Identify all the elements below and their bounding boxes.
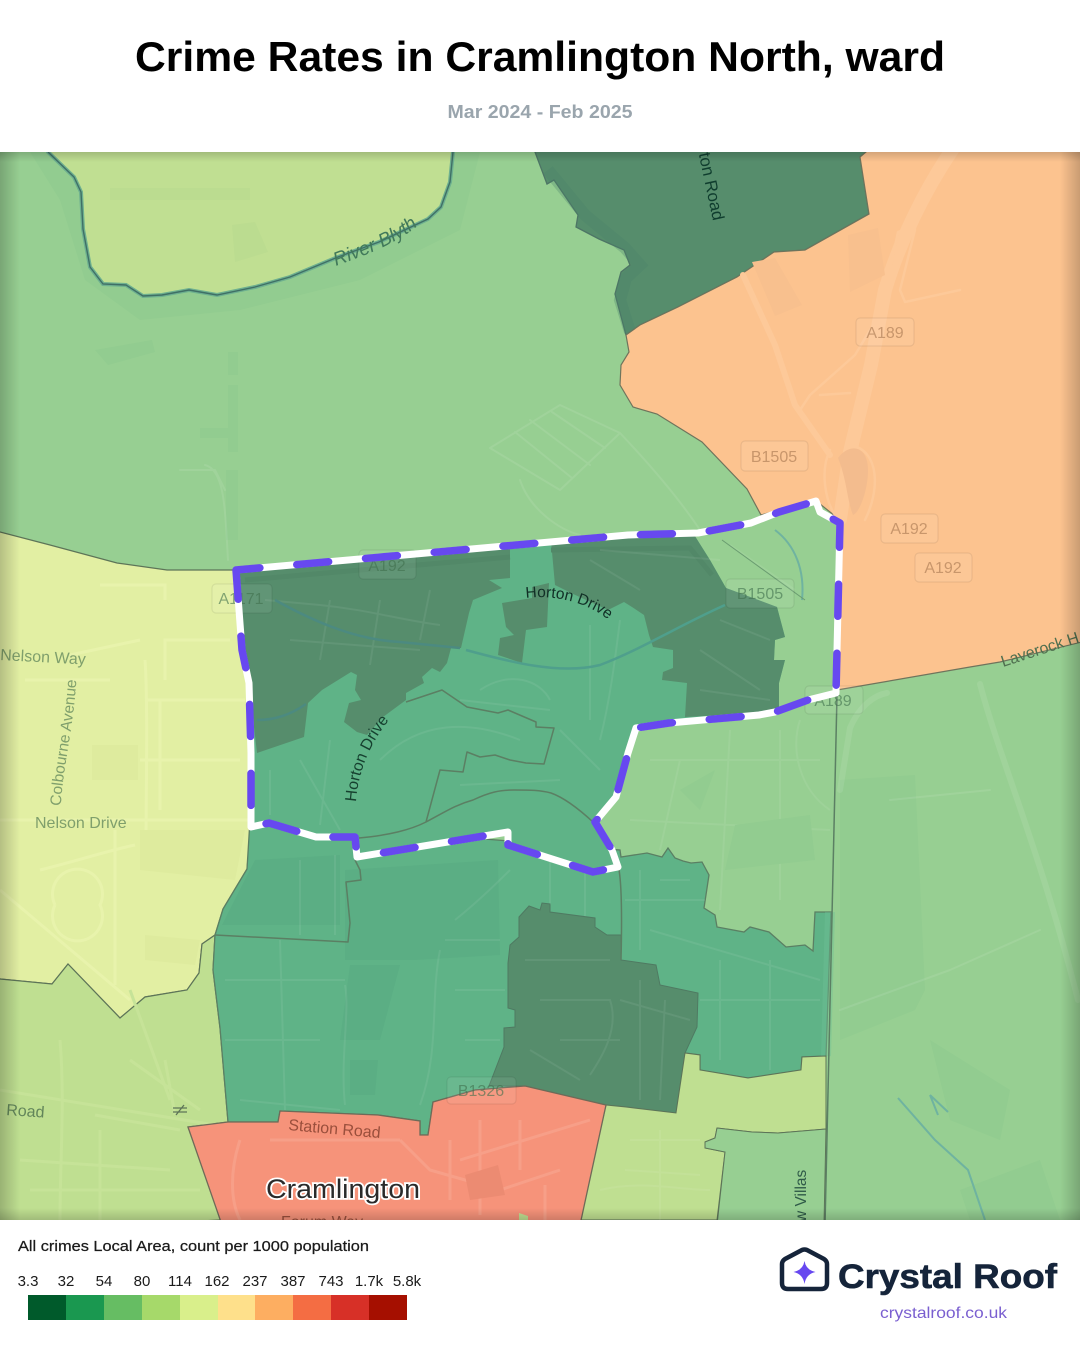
ward boundary: white underlay and purple dashes <box>236 501 840 872</box>
subtitle: date range: Mar 2024 - Feb 2025 <box>448 101 632 122</box>
legend tick values: 743 <box>318 1273 344 1290</box>
region: yellow-green south-west <box>0 935 228 1230</box>
legend tick values: 237 <box>242 1273 268 1290</box>
map label: Laverock: Laverock H <box>999 630 1080 671</box>
map label: Station Road: Station Road <box>288 1117 381 1142</box>
legend <box>18 1238 422 1320</box>
road network on orange <box>743 150 960 520</box>
streets on yellow-green <box>128 990 214 1124</box>
field patches in river field <box>110 188 268 262</box>
legend tick values: 80 <box>134 1273 150 1290</box>
region: inner south-east light green <box>705 1128 826 1225</box>
icon: house with star <box>782 1250 827 1289</box>
region: river field north-west <box>48 142 453 296</box>
ward area: mid green <box>236 533 785 872</box>
legend tick values: 32 <box>58 1273 74 1290</box>
road shield: A192 east <box>881 514 938 543</box>
road shield: A192 ward <box>359 550 416 579</box>
streets in mid green <box>225 855 820 1110</box>
ward streets <box>265 550 770 830</box>
road shield: B1326: B1326 <box>458 1083 504 1100</box>
inner area boundaries <box>359 790 593 838</box>
road shield: A192 east lower: A192 <box>924 560 962 577</box>
legend tick values: 54 <box>96 1273 112 1290</box>
map label: Villas: w Villas <box>793 1169 810 1223</box>
map label: Cramlington: Cramlington <box>266 1174 420 1204</box>
road shield: B1505 ward <box>726 579 794 608</box>
road shield: A192 ward: A192 <box>368 558 406 575</box>
legend tick values: 162 <box>204 1273 230 1290</box>
map label: Horton Road: Horton Road <box>689 124 728 222</box>
ward area: light base <box>236 501 840 872</box>
road shield: A192 east: A192 <box>890 521 928 538</box>
region: dark green south <box>489 903 698 1113</box>
legend title: All crimes Local Area, count per 1000 population <box>18 1238 369 1255</box>
streams <box>275 600 460 648</box>
road shield: A189: A189 <box>866 325 904 342</box>
field patches in mid green <box>222 855 500 1095</box>
map label: Horton Drive west: Horton Drive <box>345 716 388 801</box>
icon: rail station symbol <box>173 1105 187 1115</box>
legend tick values: 387 <box>280 1273 306 1290</box>
legend tick values: 5.8k <box>393 1273 422 1290</box>
map label: Nelson Drive: Nelson Drive <box>35 815 127 832</box>
map label: Forum Way: Forum Way <box>281 1214 363 1231</box>
road shield: B1326 <box>447 1077 516 1104</box>
road shield: A192 east lower <box>915 553 972 582</box>
legend tick values: 1.7k <box>355 1273 384 1290</box>
title: Crime Rates in Cramlington North, ward <box>135 33 945 80</box>
map label: Colbourne Avenue: Colbourne Avenue <box>50 680 76 805</box>
region: mid green south <box>213 820 831 1135</box>
legend tick values: 114 <box>168 1273 192 1290</box>
ward streets in light area <box>630 545 830 910</box>
logo wordmark: Crystal Roof <box>838 1258 1058 1296</box>
road shield: A1171 <box>212 584 272 613</box>
region: salmon town centre <box>188 1086 606 1225</box>
streets on south-east <box>659 1220 661 1221</box>
logo: Crystal Roof <box>782 1250 1058 1322</box>
region: orange north-east <box>620 142 1080 690</box>
road shield: A1171: A1171 <box>218 591 264 608</box>
streets on pale yellow <box>0 585 250 1000</box>
roads east <box>840 684 1078 1000</box>
website url: crystalroof.co.uk <box>880 1305 1008 1322</box>
road shield: A189 <box>856 318 914 346</box>
map label: Road: Road <box>6 1102 45 1122</box>
road shield: B1505 ward: B1505 <box>737 586 783 603</box>
region: dark green north <box>535 142 869 335</box>
road shield: A189 south <box>805 686 863 714</box>
road shield: B1505 north <box>741 441 808 471</box>
region: pale yellow west <box>0 531 251 1018</box>
streets in dark south <box>525 960 690 1100</box>
map edge vignette <box>0 152 1080 1220</box>
region: yellow-green south-east <box>580 1053 826 1220</box>
map label: Horton Drive north: Horton Drive <box>526 586 612 618</box>
map label: River Blyth: River Blyth <box>334 218 416 266</box>
region: ward dark patch centre <box>498 583 549 663</box>
map label: Nelson Way: Nelson Way <box>0 647 86 668</box>
road shield: A189 south: A189 <box>814 693 852 710</box>
terrain patches <box>30 152 1060 1220</box>
darker road band along A192 <box>510 548 552 560</box>
region: ward dark patch west <box>238 545 510 753</box>
road shield: B1505 north: B1505 <box>751 449 797 466</box>
legend tick values <box>18 1273 422 1290</box>
legend tick values: 3.3 <box>18 1273 38 1290</box>
legend colour scale <box>28 1295 407 1320</box>
streets on salmon <box>232 1120 590 1220</box>
region: ward dark patch east <box>551 533 785 717</box>
